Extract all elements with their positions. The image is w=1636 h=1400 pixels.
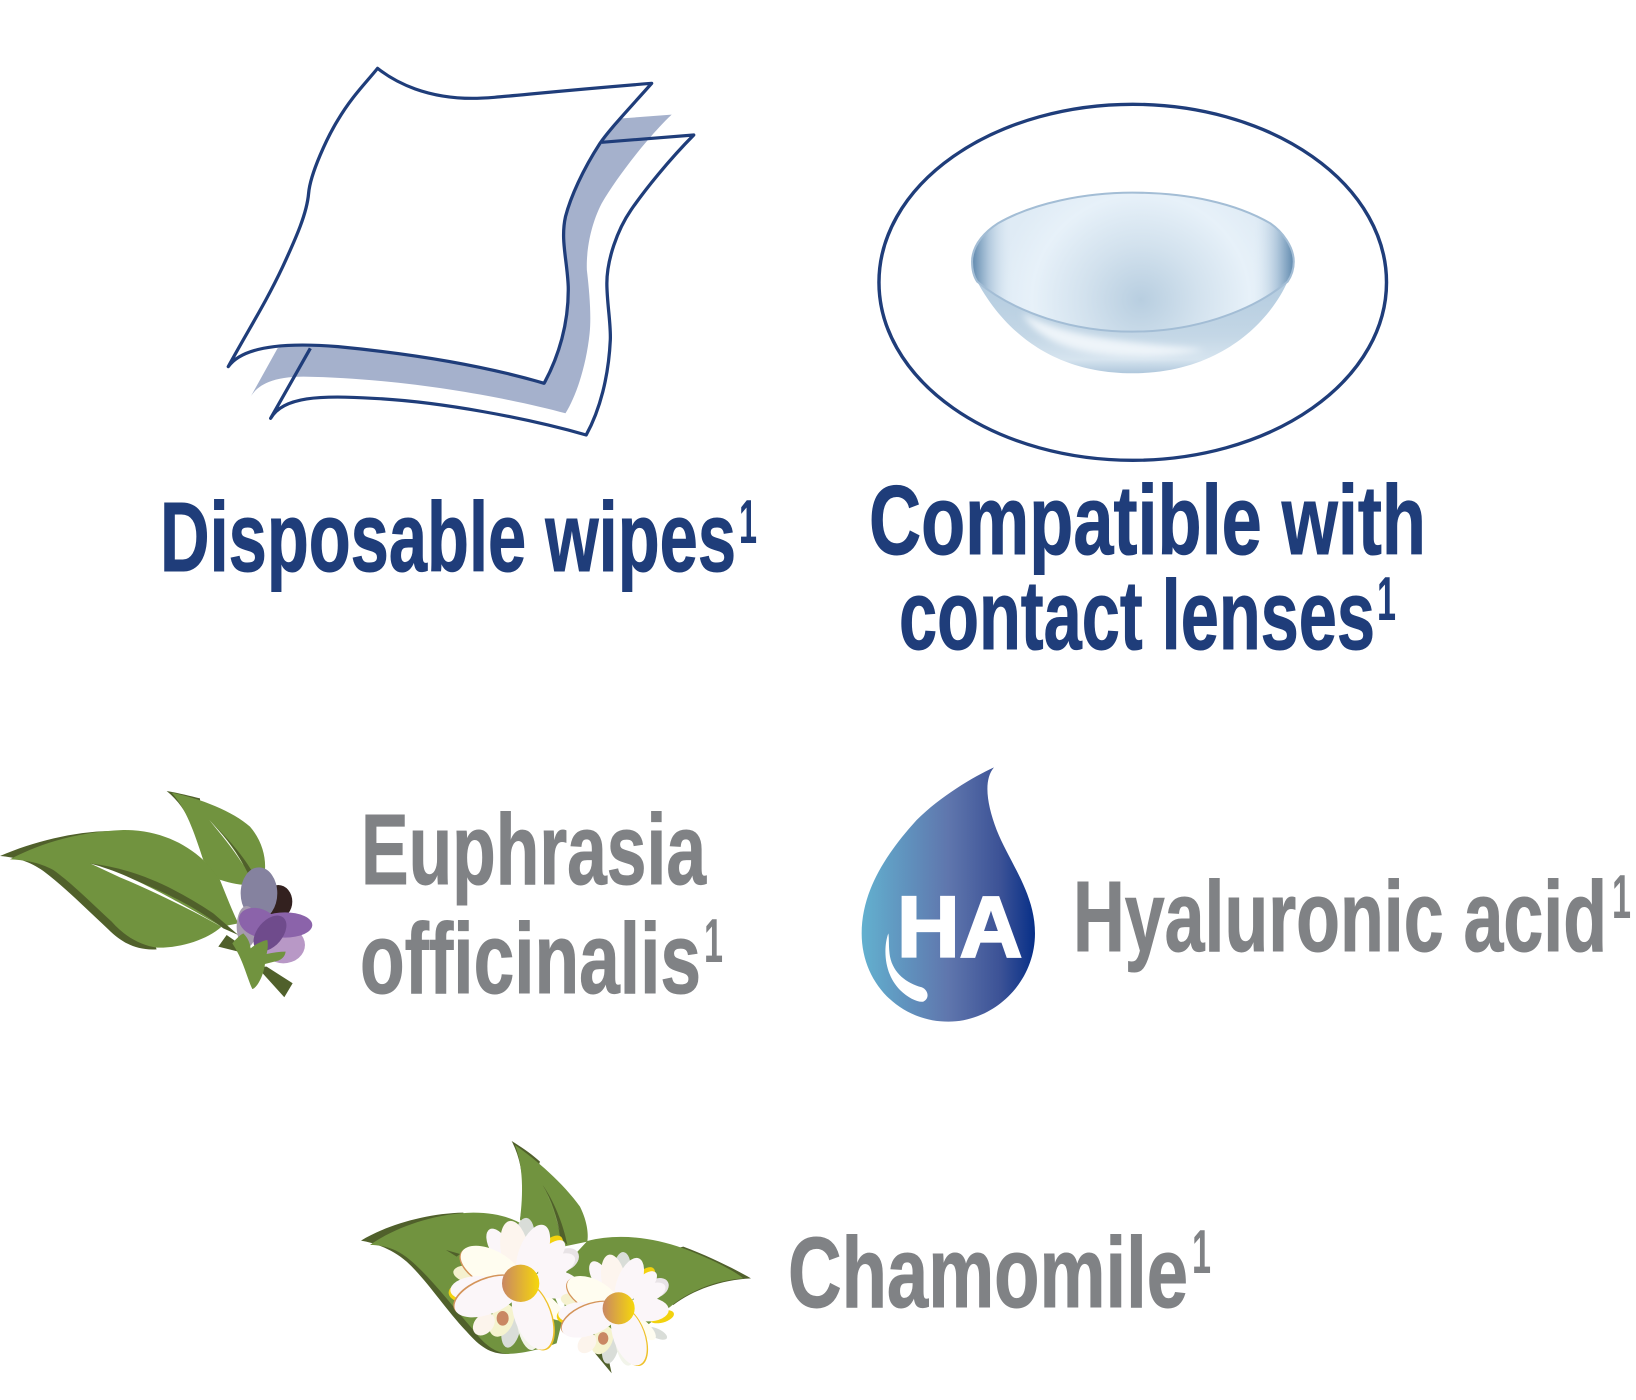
heading: disposable wipes: 1 (739, 488, 757, 557)
heading: compatible with contact lenses: Compatible with (869, 465, 1426, 575)
icon: disposable wipes (228, 68, 694, 435)
label: euphrasia officinalis: 1 (704, 907, 723, 976)
icon: euphrasia leaves and flower (0, 791, 312, 997)
heading: compatible with contact lenses (869, 465, 1426, 670)
icon: contact lens in circle (879, 104, 1387, 460)
label: euphrasia officinalis (360, 794, 723, 1015)
label: euphrasia officinalis: officinalis (360, 903, 701, 1015)
label: euphrasia officinalis: Euphrasia (361, 794, 707, 906)
heading: compatible with contact lenses: 1 (1377, 565, 1396, 634)
icon: hyaluronic acid drop: HA (897, 880, 1022, 976)
icon: hyaluronic acid drop (862, 767, 1035, 1022)
label: chamomile: Chamomile (788, 1217, 1188, 1329)
heading: disposable wipes: Disposable wipes (160, 482, 736, 592)
label: chamomile: 1 (1192, 1218, 1211, 1287)
heading: compatible with contact lenses: contact lenses (899, 560, 1375, 670)
icon: chamomile leaves and flowers (361, 1141, 751, 1373)
